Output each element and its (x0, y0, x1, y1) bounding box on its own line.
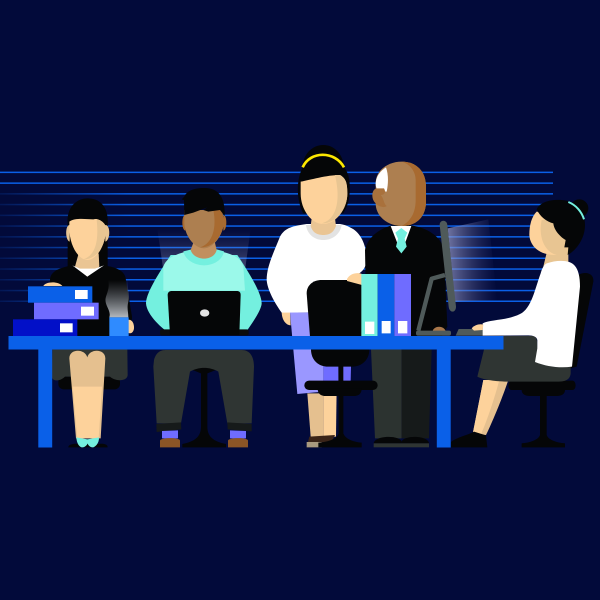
face shade (322, 175, 347, 223)
trousers left (371, 349, 402, 438)
folder bottom (13, 319, 77, 336)
monitor screen (440, 221, 456, 312)
torso (50, 265, 132, 336)
collar (306, 225, 342, 240)
upright binders (361, 274, 411, 336)
laptop glow (157, 229, 251, 270)
desk (8, 336, 504, 448)
ears (182, 215, 226, 231)
hand (282, 312, 291, 325)
ear (372, 188, 387, 207)
collar (72, 265, 104, 277)
hand on cup (128, 320, 134, 333)
folder top label (75, 290, 88, 299)
laptop logo (200, 309, 209, 317)
white hair (376, 167, 388, 192)
chair seat (311, 349, 369, 367)
sweater (267, 224, 367, 313)
shoes (374, 437, 429, 443)
teal heels (76, 437, 99, 447)
shoes (160, 438, 248, 447)
office chair, centre (304, 280, 378, 447)
woman in black dress, left (43, 198, 134, 447)
trousers (153, 350, 254, 423)
monitor stand (418, 275, 445, 331)
head shade (402, 162, 426, 226)
socks (162, 430, 246, 438)
leg light side (323, 387, 337, 437)
skirt (477, 336, 571, 382)
neck (75, 253, 99, 277)
chair stem (318, 363, 362, 447)
chair stem and base (522, 393, 565, 447)
stacked folders, left (13, 280, 129, 336)
stool (182, 362, 226, 447)
keyboard (456, 329, 483, 336)
suit jacket (365, 225, 447, 337)
chair backrest (307, 280, 362, 337)
standing woman in white sweater (267, 145, 367, 447)
monitor and worker, right (416, 199, 593, 447)
chair seat (508, 381, 576, 396)
bun (570, 199, 588, 217)
binder teal (361, 274, 378, 336)
legs (307, 393, 323, 437)
folder bottom label (60, 323, 73, 332)
folder middle (34, 303, 99, 319)
cuffs (156, 422, 252, 432)
binder blue (378, 274, 394, 336)
standing man in suit, back view (365, 162, 447, 447)
chair arm bar (304, 381, 378, 390)
back skirt panel (323, 340, 352, 393)
skirt (290, 312, 323, 394)
hair (68, 198, 108, 267)
neck (311, 218, 336, 235)
binder violet (394, 274, 411, 336)
chair back (570, 273, 593, 368)
monitor base (416, 331, 451, 336)
blouse (483, 261, 580, 367)
leg (473, 380, 499, 435)
background horizontal lines (0, 172, 553, 302)
leg shade (473, 380, 508, 435)
shirt (391, 226, 411, 253)
sweater body (163, 251, 245, 291)
face (529, 212, 568, 255)
desk leg right (437, 349, 451, 448)
soles (374, 443, 429, 447)
hair (537, 200, 585, 255)
shoe (307, 435, 335, 447)
person hand at desk (433, 327, 446, 331)
neck (191, 240, 217, 259)
laptop (168, 291, 241, 335)
trousers right (402, 349, 432, 438)
seated man with laptop (146, 188, 262, 447)
coffee steam (105, 280, 129, 317)
coffee cup (109, 317, 129, 336)
binder labels (365, 321, 407, 334)
hand on folders (347, 273, 362, 285)
face shade (541, 217, 568, 255)
monitor glow (448, 219, 497, 302)
face (184, 210, 224, 248)
face shade (200, 210, 224, 247)
sweater sleeves (146, 255, 262, 333)
face (69, 219, 106, 260)
tie (395, 228, 407, 253)
chair support (318, 388, 362, 396)
hand on folder (43, 282, 62, 286)
collar (183, 249, 224, 265)
shoes (68, 444, 108, 447)
hairband (303, 155, 344, 167)
shoe sole (307, 442, 322, 447)
folder top (28, 286, 92, 303)
hand (472, 324, 483, 331)
hair band (568, 202, 584, 219)
desk top (8, 336, 504, 350)
folder middle label (81, 307, 94, 316)
neck (543, 247, 568, 267)
shoe (451, 432, 487, 447)
chair under skirt (58, 377, 120, 389)
face shade (83, 220, 106, 259)
lower legs (73, 387, 102, 438)
hair (182, 188, 225, 216)
desk leg left (38, 349, 52, 448)
hair (298, 145, 350, 213)
skirt (52, 349, 128, 380)
face (301, 175, 347, 224)
head (376, 162, 426, 226)
ears (66, 225, 109, 242)
laptop base (160, 329, 249, 335)
legs (69, 351, 105, 438)
